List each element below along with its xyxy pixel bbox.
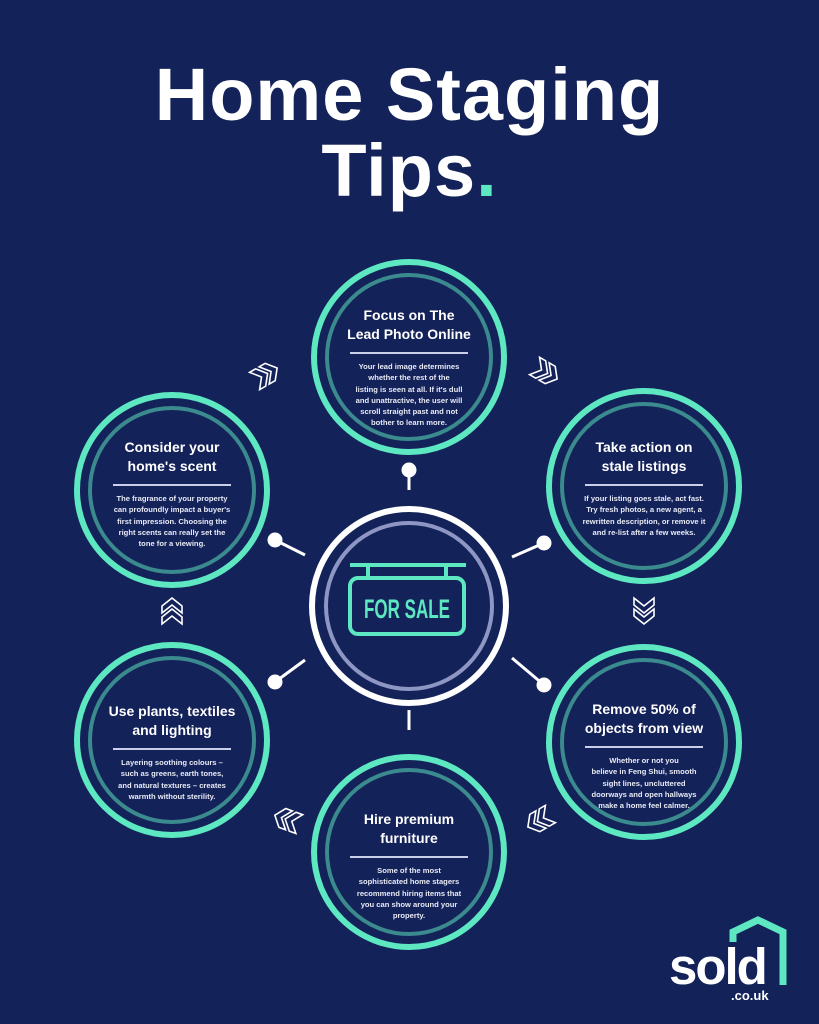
for sale sign — [350, 565, 466, 634]
panel: stale listings: stale listings — [602, 458, 686, 474]
panel: furniture: you can show around your — [361, 900, 457, 909]
panel: plants — [109, 703, 235, 801]
panel: remove objects: Remove 50% of — [592, 701, 696, 717]
chevrons — [162, 357, 654, 836]
panel: furniture: property. — [393, 911, 425, 920]
panel: remove objects: Whether or not you — [609, 756, 679, 765]
diagram graphics: FOR SALE — [364, 594, 450, 624]
panel: stale listings: Try fresh photos, a new agent, a — [586, 505, 702, 514]
panel: scent — [113, 439, 231, 548]
panel: lead photo: and unattractive, the user will — [356, 396, 462, 405]
panel: furniture: Some of the most — [377, 866, 441, 875]
panel: furniture: recommend hiring items that — [357, 889, 461, 898]
panel: plants: and natural textures – creates — [118, 781, 226, 790]
panel: scent: The fragrance of your property — [116, 494, 227, 503]
title line 2: Tips. — [321, 129, 498, 212]
panel: stale listings — [583, 439, 706, 537]
panel: stale listings: and re-list after a few weeks. — [592, 528, 695, 537]
logo text: sold — [669, 938, 766, 995]
panel: stale listings: If your listing goes stale, act fast. — [584, 494, 704, 503]
panel: scent: home's scent — [128, 458, 216, 474]
panel: remove objects: make a home feel calmer. — [598, 801, 690, 810]
panel: scent: can profoundly impact a buyer's — [114, 505, 230, 514]
panel: plants: such as greens, earth tones, — [121, 769, 223, 778]
panel: lead photo — [347, 307, 471, 427]
panel: remove objects: believe in Feng Shui, smooth — [591, 767, 697, 776]
panel: plants: warmth without sterility. — [129, 792, 215, 801]
panel: remove objects: doorways and open hallways — [591, 790, 697, 799]
panel: lead photo: bother to learn more. — [371, 418, 447, 427]
panel: lead photo: scroll straight past and not — [360, 407, 458, 416]
panel: lead photo: Lead Photo Online — [347, 326, 471, 342]
panel: lead photo: whether the rest of the — [368, 373, 450, 382]
panel: lead photo: Your lead image determines — [359, 362, 459, 371]
panel: stale listings: rewritten description, or remove it — [583, 517, 705, 526]
panel: furniture: sophisticated home stagers — [359, 877, 459, 886]
panel: scent: Consider your — [125, 439, 219, 455]
panel: remove objects: sight lines, uncluttered — [602, 779, 686, 788]
panel: scent: first impression. Choosing the — [117, 517, 227, 526]
panel: furniture: Hire premium — [364, 811, 454, 827]
panel: lead photo: listing is seen at all. If it's dull — [356, 385, 462, 394]
logo house — [733, 920, 783, 985]
panel: stale listings: Take action on — [596, 439, 692, 455]
logo domain: .co.uk — [731, 988, 769, 1003]
panel: plants: Use plants, textiles — [109, 703, 235, 719]
panel: furniture: furniture — [380, 830, 438, 846]
panel: remove objects: objects from view — [585, 720, 703, 736]
title: Home Staging — [155, 53, 664, 136]
panel: furniture — [350, 811, 468, 920]
panel: plants: and lighting — [132, 722, 212, 738]
panel: remove objects — [585, 701, 704, 810]
panel: scent: right scents can really set the — [119, 528, 225, 537]
panel: scent: tone for a viewing. — [139, 539, 205, 548]
panel: lead photo: Focus on The — [364, 307, 454, 323]
panel: plants: Layering soothing colours – — [121, 758, 223, 767]
